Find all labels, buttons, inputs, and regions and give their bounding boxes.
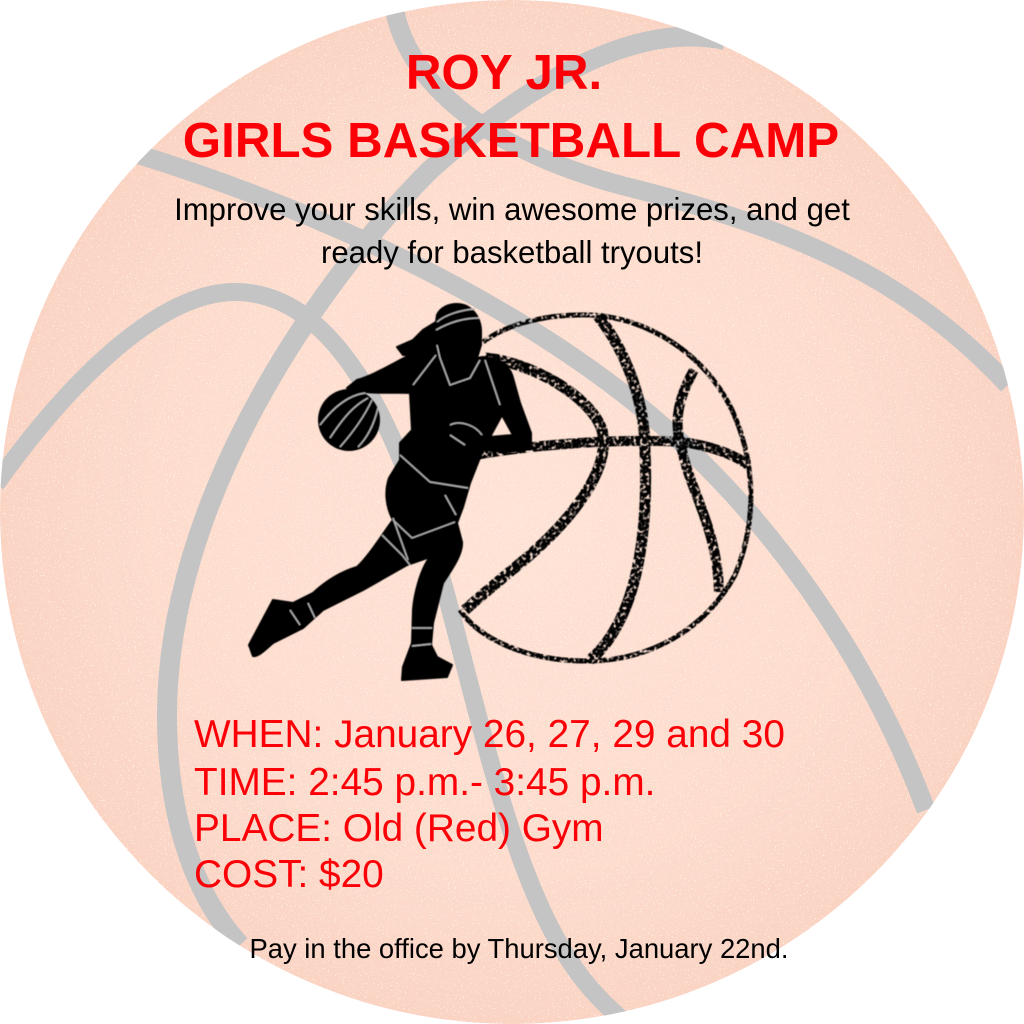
subtitle: ready for basketball tryouts! — [321, 235, 703, 270]
title: ROY JR. — [406, 45, 602, 100]
event details: WHEN: January 26, 27, 29 and 30 — [194, 713, 785, 756]
event details: PLACE: Old (Red) Gym — [194, 807, 604, 850]
icon: dribbling player silhouette — [249, 304, 531, 680]
silhouette detail lines — [290, 309, 500, 646]
payment note: Pay in the office by Thursday, January 22nd. — [249, 933, 789, 964]
title — [183, 45, 839, 168]
event details: TIME: 2:45 p.m.- 3:45 p.m. — [194, 761, 655, 804]
small ball — [318, 389, 380, 451]
event details — [194, 713, 785, 896]
title: GIRLS BASKETBALL CAMP — [183, 113, 839, 168]
subtitle — [174, 192, 850, 270]
icon: large textured basketball — [460, 315, 751, 661]
subtitle: Improve your skills, win awesome prizes, and get — [174, 192, 850, 227]
event details: COST: $20 — [194, 853, 384, 896]
